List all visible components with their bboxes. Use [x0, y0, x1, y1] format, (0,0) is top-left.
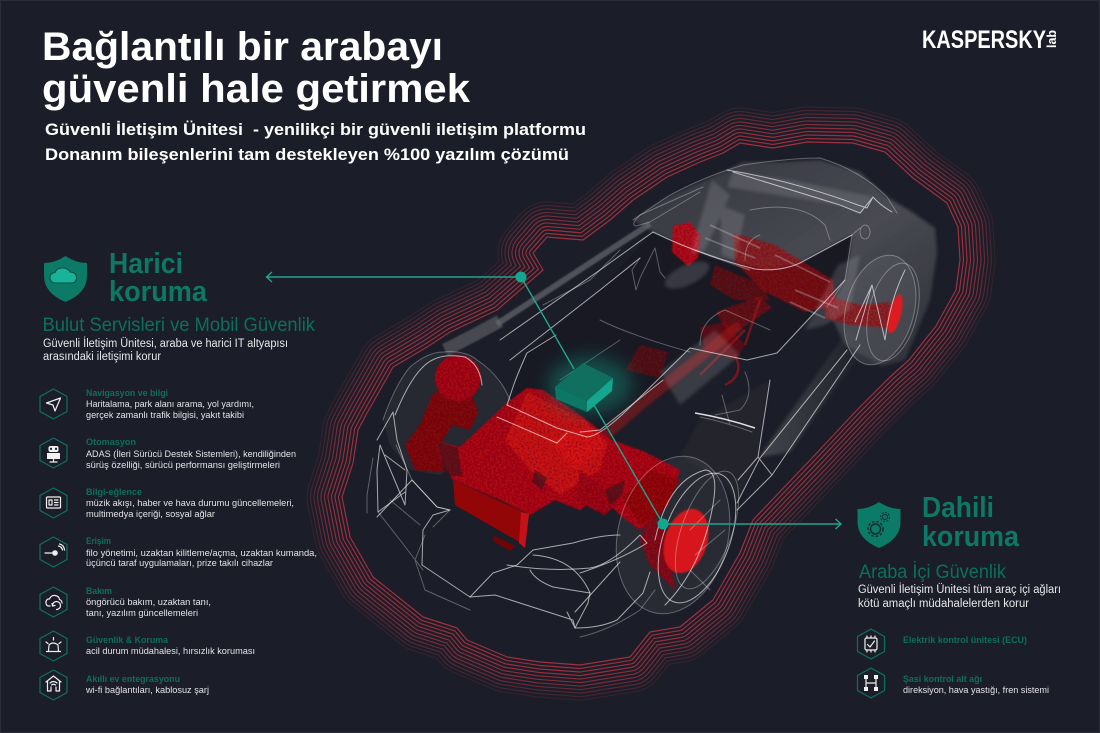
heading: external protection — [109, 248, 208, 308]
heading: external protection: Harici — [109, 248, 183, 280]
item: safety and security — [40, 631, 255, 661]
item: maintenance: tanı, yazılım güncellemeleri — [86, 608, 198, 619]
left vent ellipse — [634, 187, 703, 226]
item: infotainment: Bilgi-eğlence — [86, 487, 142, 498]
logo: Kaspersky lab: lab — [1044, 30, 1059, 48]
item: automation: ADAS (İleri Sürücü Destek Sistemleri), kendiliğinden — [86, 449, 296, 460]
subtitle: Donanım bileşenlerini tam destekleyen %100 yazılım çözümü — [45, 146, 569, 164]
item: access: filo yönetimi, uzaktan kilitleme/açma, uzaktan kumanda, — [86, 548, 317, 559]
radiator — [453, 480, 529, 551]
front right wheel arch shell — [600, 444, 746, 626]
item: safety and security: acil durum müdahalesi, hırsızlık koruması — [86, 646, 255, 657]
item: automation — [40, 437, 296, 471]
front right wheel rings — [600, 444, 746, 626]
icon: cloud refresh — [40, 587, 67, 617]
secure communication unit — [548, 357, 632, 413]
item: safety and security: Güvenlik & Koruma — [86, 635, 169, 646]
item: infotainment — [40, 487, 294, 520]
heading: external protection: koruma — [109, 276, 208, 308]
left sill — [445, 321, 500, 350]
car illustration — [367, 158, 937, 637]
icon: chip — [858, 629, 884, 659]
red driveshaft — [600, 325, 740, 440]
roof outline — [633, 158, 897, 220]
left pillars — [500, 232, 653, 405]
rear window — [727, 170, 892, 213]
crumpled fender lines — [377, 412, 407, 512]
cabin interior — [507, 232, 852, 437]
item: smart home: Akıllı ev entegrasyonu — [86, 674, 180, 685]
right sill streak — [760, 327, 868, 457]
headlight — [507, 535, 650, 628]
front left wheel arch — [383, 352, 510, 420]
item: ECU — [858, 629, 1027, 659]
lower body shadow — [680, 380, 770, 503]
item: chassis subnet — [858, 668, 1049, 698]
windshield bottom double line — [507, 280, 845, 437]
icon: navigation arrow — [40, 389, 67, 419]
rear window — [727, 172, 873, 213]
icon: gears shield — [858, 502, 900, 548]
item: smart home — [40, 670, 209, 700]
item: maintenance: Bakım — [86, 586, 112, 597]
title: güvenli hale getirmek — [42, 67, 471, 111]
item: chassis subnet: Şasi kontrol alt ağı — [903, 674, 982, 685]
item: infotainment: müzik akışı, haber ve hava durumu güncellemeleri, — [86, 498, 294, 509]
heading: internal protection: Dahili — [922, 492, 994, 524]
rear wheel shell — [833, 247, 927, 373]
item: navigation: Navigasyon ve bilgi — [86, 388, 168, 399]
icon: chassis — [858, 668, 884, 698]
ghost seats — [660, 180, 860, 405]
description — [858, 583, 1061, 610]
cabin rim bright — [653, 232, 852, 270]
subtitle — [45, 120, 586, 164]
description: Güvenli İletişim Ünitesi tüm araç içi ağları — [858, 583, 1061, 596]
cabin right pillar — [827, 225, 870, 307]
item: chassis subnet: direksiyon, hava yastığı, fren sistemi — [903, 685, 1049, 696]
item: ECU: Elektrik kontrol ünitesi (ECU) — [903, 635, 1027, 646]
item: automation: Otomasyon — [86, 437, 136, 448]
lower left bumper — [377, 480, 620, 597]
rear body shell — [633, 160, 937, 366]
item: smart home: wi-fi bağlantıları, kablosuz şarj — [85, 685, 209, 696]
description: Güvenli İletişim Ünitesi, araba ve harici IT altyapısı — [43, 337, 288, 350]
icon: cloud shield — [44, 256, 87, 302]
right sill lines — [737, 345, 860, 510]
glow — [548, 357, 632, 413]
rear stripes — [695, 225, 838, 318]
icon: wifi home — [40, 670, 67, 700]
item: navigation — [40, 388, 254, 421]
item: access: üçüncü taraf uygulamaları, prize takılı cihazlar — [86, 558, 273, 569]
front left wheel arch shell — [383, 352, 510, 475]
description — [43, 337, 288, 363]
item: access — [40, 536, 317, 569]
icon: wireless key — [40, 537, 67, 567]
icon: screen — [40, 488, 67, 518]
title — [42, 25, 471, 111]
description: arasındaki iletişimi korur — [43, 351, 161, 363]
item: navigation: gerçek zamanlı trafik bilgisi, yakıt takibi — [86, 410, 244, 421]
panel: internal protection — [858, 492, 1061, 698]
connector lines and arrows — [266, 272, 841, 530]
red engine block — [437, 388, 680, 530]
subtitle: Güvenli İletişim Ünitesi - yenilikçi bir güvenli iletişim platformu — [45, 120, 586, 139]
logo: Kaspersky lab: KASPERSKY — [922, 26, 1046, 54]
icon: robot — [40, 438, 67, 468]
item: automation: sürüş özelliği, sürücü performansı geliştirmeleri — [86, 460, 280, 471]
red rear wheel hub — [884, 293, 906, 335]
item: maintenance — [40, 586, 211, 619]
white car outlines — [367, 158, 928, 637]
heading: internal protection: koruma — [922, 521, 1020, 553]
title: Bağlantılı bir arabayı — [42, 25, 443, 69]
rear wheel — [833, 247, 927, 373]
bright seat line — [695, 413, 755, 428]
item: access: Erişim — [86, 536, 111, 547]
subheading: Bulut Servisleri ve Mobil Güvenlik — [42, 315, 315, 336]
heading: internal protection — [922, 492, 1020, 553]
red front left wheel assembly — [405, 355, 481, 472]
interior arcs — [560, 310, 770, 415]
item: navigation: Haritalama, park alanı arama, yol yardımı, — [86, 399, 254, 410]
red rear mechanics — [625, 222, 890, 378]
item: maintenance: öngörücü bakım, uzaktan tanı, — [86, 597, 211, 608]
subheading: Araba İçi Güvenlik — [859, 562, 1006, 583]
red front right wheel assembly — [640, 503, 716, 590]
item: infotainment: multimedya içeriği, sosyal ağlar — [86, 509, 215, 520]
contour lines around car — [342, 142, 960, 665]
icon: siren — [40, 631, 67, 661]
description: kötü amaçlı müdahalelerden korur — [858, 598, 1029, 610]
engine dark gaps — [437, 442, 625, 505]
panel: external protection — [40, 248, 317, 700]
